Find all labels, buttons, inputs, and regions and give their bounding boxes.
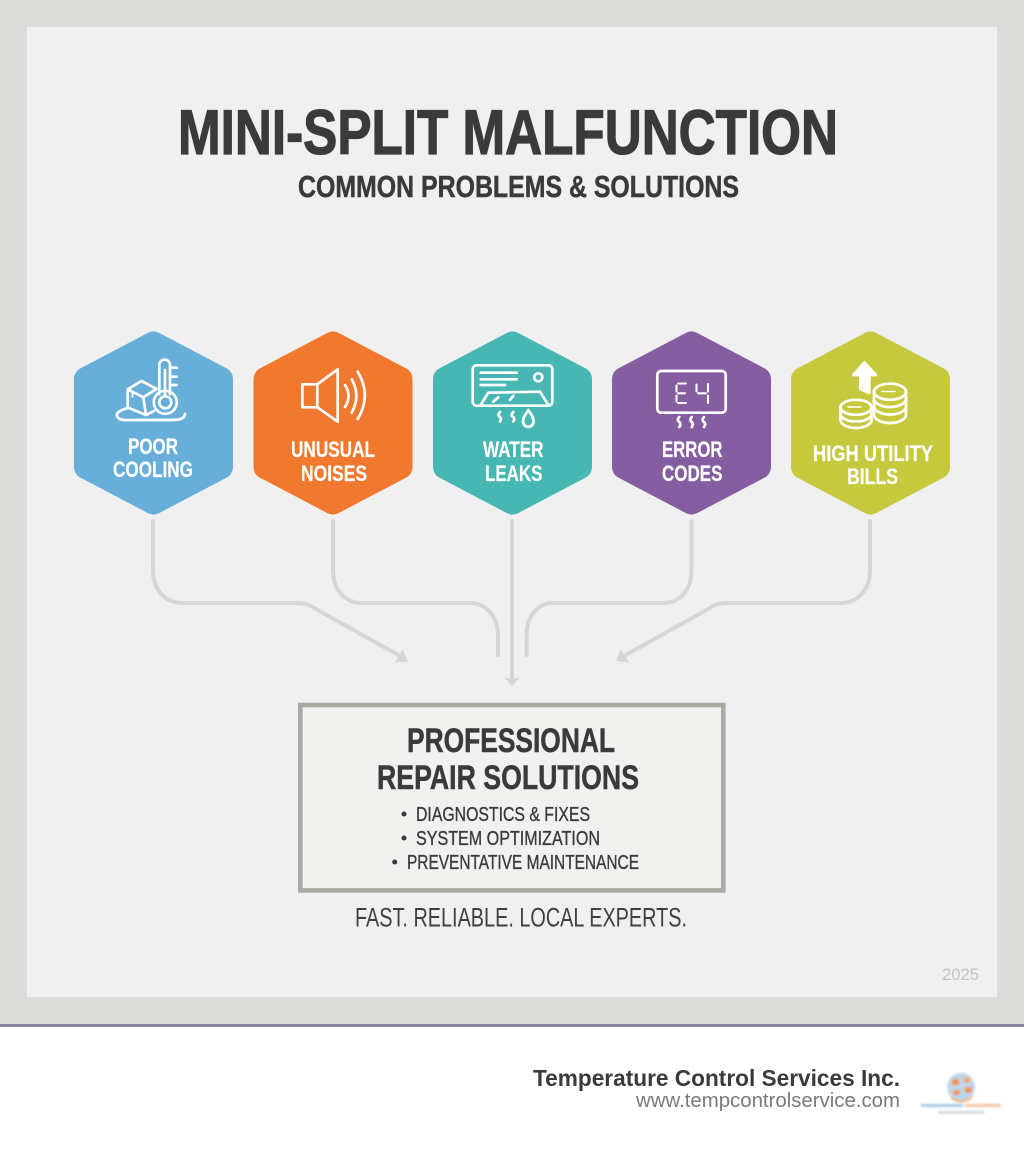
label: water leaks: LEAKS (485, 461, 542, 486)
solutions heading (377, 722, 639, 797)
hexagon: lime (803, 344, 938, 502)
arrow: high utility bills connector (616, 521, 870, 662)
panel: professional repair solutions (300, 705, 723, 890)
hexagon: blue (86, 344, 221, 502)
hexagon: teal (445, 344, 580, 502)
hexagon: purple (624, 344, 759, 502)
icon: arrow up and coins (840, 362, 906, 428)
label: error codes (662, 437, 723, 486)
tagline: FAST. RELIABLE. LOCAL EXPERTS. (355, 902, 687, 932)
solutions heading: REPAIR SOLUTIONS (377, 759, 639, 797)
panel: water leaks (445, 344, 580, 502)
label: unusual noises (291, 437, 375, 486)
arrow: poor cooling connector (153, 521, 408, 663)
footer band (0, 1027, 1024, 1154)
solutions heading: PROFESSIONAL (407, 722, 615, 760)
label: unusual noises: UNUSUAL (291, 437, 375, 462)
arrow: unusual noises connector (333, 521, 498, 655)
hexagon: orange (266, 344, 400, 502)
icon: E4 display (657, 371, 726, 427)
year: 2025 (942, 965, 979, 984)
title: MINI-SPLIT MALFUNCTION (178, 98, 838, 168)
label: poor cooling: POOR (128, 434, 178, 459)
label: high utility bills: BILLS (847, 464, 898, 489)
panel: unusual noises (266, 344, 400, 502)
solutions box (300, 705, 723, 890)
solutions list: DIAGNOSTICS & FIXES (416, 803, 590, 826)
icon: air conditioner with drips (473, 365, 552, 427)
arrow: error codes connector (526, 521, 692, 655)
website: www.tempcontrolservice.com (635, 1090, 900, 1112)
solutions list (392, 803, 639, 874)
icon: ice cube and thermometer (117, 360, 185, 420)
panel: poor cooling (86, 344, 221, 502)
label: error codes: ERROR (662, 437, 723, 462)
panel: error codes (624, 344, 759, 502)
solutions list: SYSTEM OPTIMIZATION (416, 827, 600, 850)
label: poor cooling: COOLING (113, 457, 193, 482)
company name: Temperature Control Services Inc. (533, 1065, 900, 1091)
label: water leaks: WATER (483, 437, 544, 462)
subtitle: COMMON PROBLEMS & SOLUTIONS (298, 169, 739, 204)
label: high utility bills (813, 441, 933, 489)
icon: speaker (302, 369, 365, 422)
label: poor cooling (113, 434, 193, 482)
logo (921, 1072, 1001, 1114)
solutions list: PREVENTATIVE MAINTENANCE (407, 851, 639, 874)
label: high utility bills: HIGH UTILITY (813, 441, 933, 466)
label: water leaks (483, 437, 544, 486)
panel: high utility bills (803, 344, 938, 502)
label: error codes: CODES (662, 461, 722, 486)
footer divider (0, 1024, 1024, 1027)
arrow: water leaks connector (504, 521, 520, 686)
label: unusual noises: NOISES (301, 461, 367, 486)
inner panel (27, 27, 997, 997)
